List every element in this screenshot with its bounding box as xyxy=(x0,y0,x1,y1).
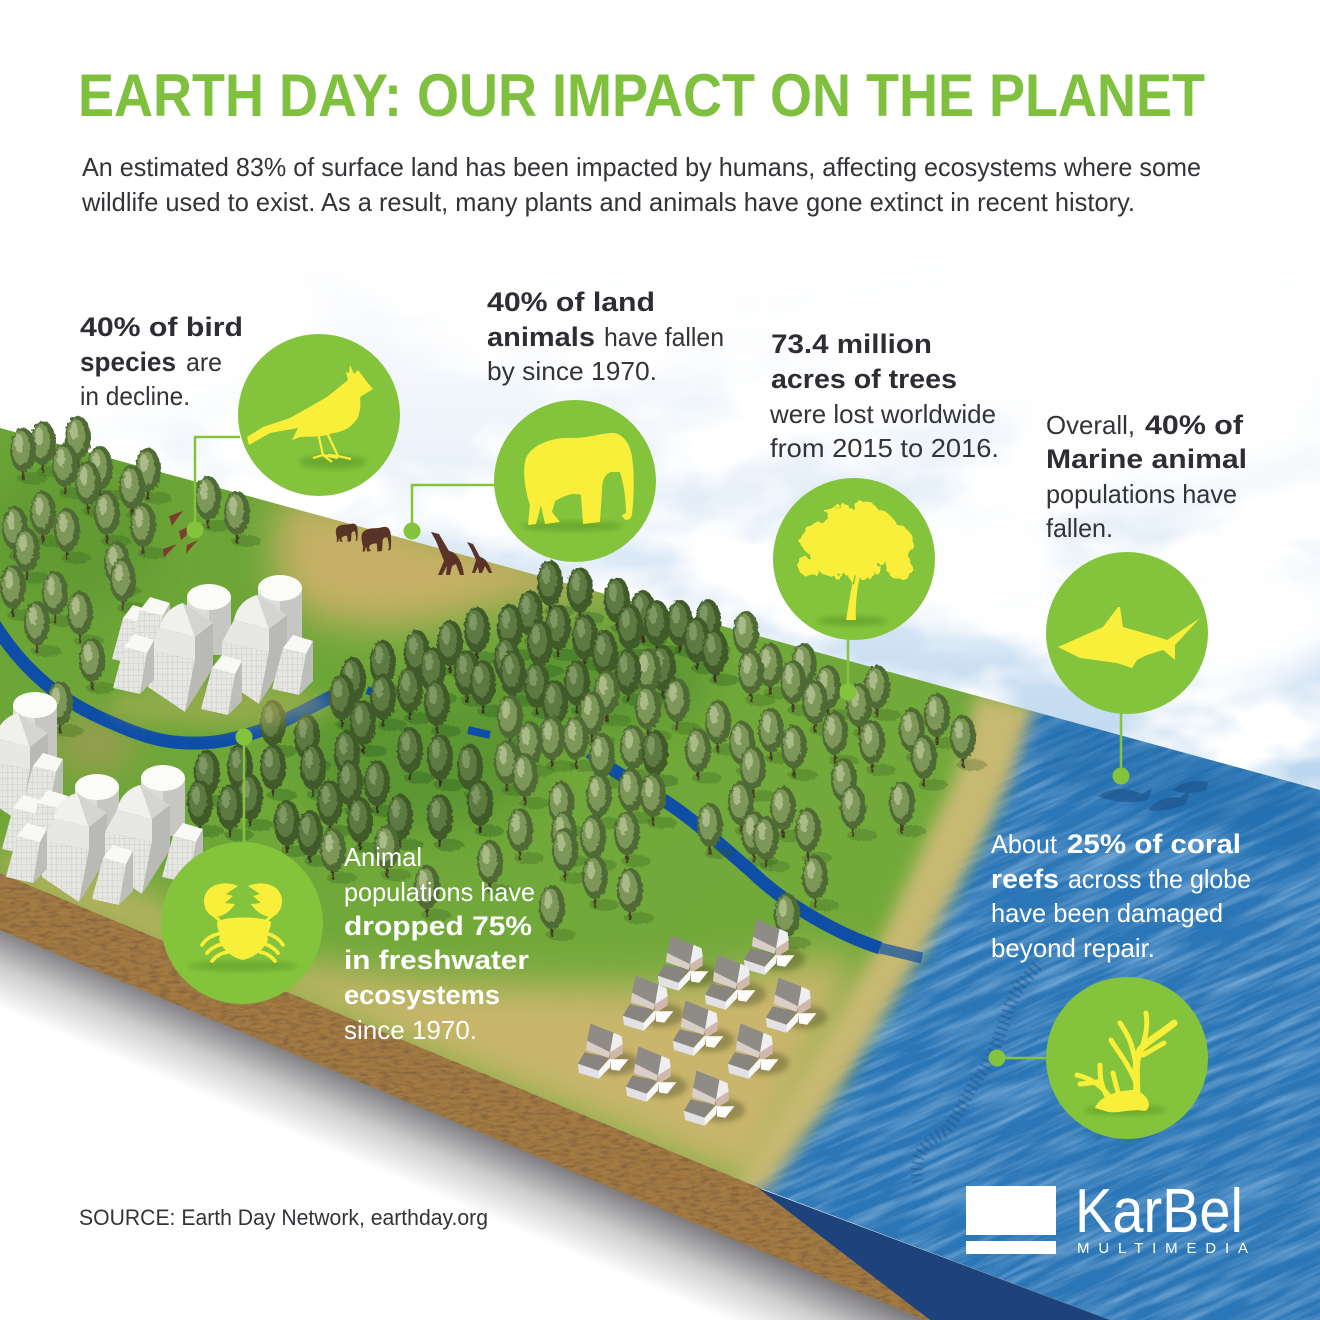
stat: marine animals xyxy=(1046,410,1247,543)
stat: coral reefs: reefs xyxy=(991,864,1059,894)
stat: trees: acres of trees xyxy=(771,364,957,394)
stat: marine animals: fallen. xyxy=(1046,513,1113,543)
stat: land animals: have fallen xyxy=(604,322,724,352)
stat: birds xyxy=(80,312,243,411)
source note: SOURCE: Earth Day Network, earthday.org xyxy=(79,1205,488,1230)
stat: marine animals: Overall, xyxy=(1046,410,1135,440)
stat: freshwater xyxy=(344,842,535,1045)
dark water triangle xyxy=(758,1188,1110,1320)
stat: coral reefs: have been damaged xyxy=(991,898,1223,928)
stat: freshwater: Animal xyxy=(344,842,422,872)
KarBel logo xyxy=(966,1177,1248,1257)
ground shadow xyxy=(0,925,930,1320)
buildings: lower-left city xyxy=(0,692,203,905)
connector: crab xyxy=(236,728,252,844)
intro text xyxy=(81,152,1201,217)
connector: birds xyxy=(186,437,240,538)
title: EARTH DAY: OUR IMPACT ON THE PLANET xyxy=(78,62,1205,129)
river xyxy=(0,625,922,958)
stat: trees xyxy=(769,329,999,463)
connector: coral xyxy=(988,1050,1048,1066)
intro text: wildlife used to exist. As a result, many plants and animals have gone extinct in recent history. xyxy=(81,187,1135,217)
stat: marine animals: Marine animal xyxy=(1046,444,1247,474)
stat: coral reefs xyxy=(991,829,1251,963)
stat: coral reefs: across the globe xyxy=(1068,864,1251,894)
central forest xyxy=(187,560,987,949)
stat: land animals xyxy=(487,287,724,386)
stat: coral reefs: 25% of coral xyxy=(1067,829,1241,859)
stat: freshwater: ecosystems xyxy=(344,980,500,1010)
stat: trees: were lost worldwide xyxy=(769,399,996,429)
stat: birds: in decline. xyxy=(80,381,190,411)
stat: land animals: by since 1970. xyxy=(487,356,657,386)
fish shadows xyxy=(1098,781,1208,811)
small birds xyxy=(163,511,198,558)
shoreline beach xyxy=(735,695,1070,1205)
icon: bird xyxy=(238,334,400,496)
coral reef under water xyxy=(917,962,1040,1182)
connector: trees xyxy=(840,638,856,700)
icon: shark xyxy=(1046,552,1208,714)
intro text: An estimated 83% of surface land has been impacted by humans, affecting ecosystems where some xyxy=(82,152,1201,182)
upper-left forest xyxy=(0,416,261,737)
stat: birds: are xyxy=(186,347,222,377)
stat: marine animals: populations have xyxy=(1046,479,1237,509)
KarBel logo: MULTIMEDIA xyxy=(1077,1240,1248,1257)
stat: land animals: animals xyxy=(487,322,595,352)
stat: birds: species xyxy=(80,347,176,377)
connector: marine xyxy=(1112,712,1130,784)
house shadows and houses xyxy=(578,920,827,1126)
sea xyxy=(750,708,1320,1320)
stat: trees: 73.4 million xyxy=(771,329,932,359)
stat: coral reefs: About xyxy=(991,829,1058,859)
stat: trees: from 2015 to 2016. xyxy=(770,433,999,463)
stat: freshwater: populations have xyxy=(344,877,535,907)
stat: freshwater: since 1970. xyxy=(344,1015,477,1045)
icon: elephant xyxy=(494,400,656,562)
connector: land animals xyxy=(404,485,496,540)
icon: tree xyxy=(773,478,935,640)
stat: freshwater: dropped 75% xyxy=(344,911,532,941)
stat: marine animals: 40% of xyxy=(1145,410,1244,440)
stat: birds: 40% of bird xyxy=(80,312,243,342)
buildings: upper city xyxy=(110,575,330,727)
stat: land animals: 40% of land xyxy=(487,287,655,317)
KarBel logo: KarBel xyxy=(1075,1177,1243,1246)
landscape surface xyxy=(0,420,1320,1320)
small elephants and giraffes xyxy=(336,524,492,575)
icon: crab xyxy=(161,842,323,1004)
stat: coral reefs: beyond repair. xyxy=(991,933,1155,963)
stat: freshwater: in freshwater xyxy=(344,945,530,975)
soil cross-section xyxy=(0,873,930,1320)
icon: coral xyxy=(1046,977,1208,1139)
